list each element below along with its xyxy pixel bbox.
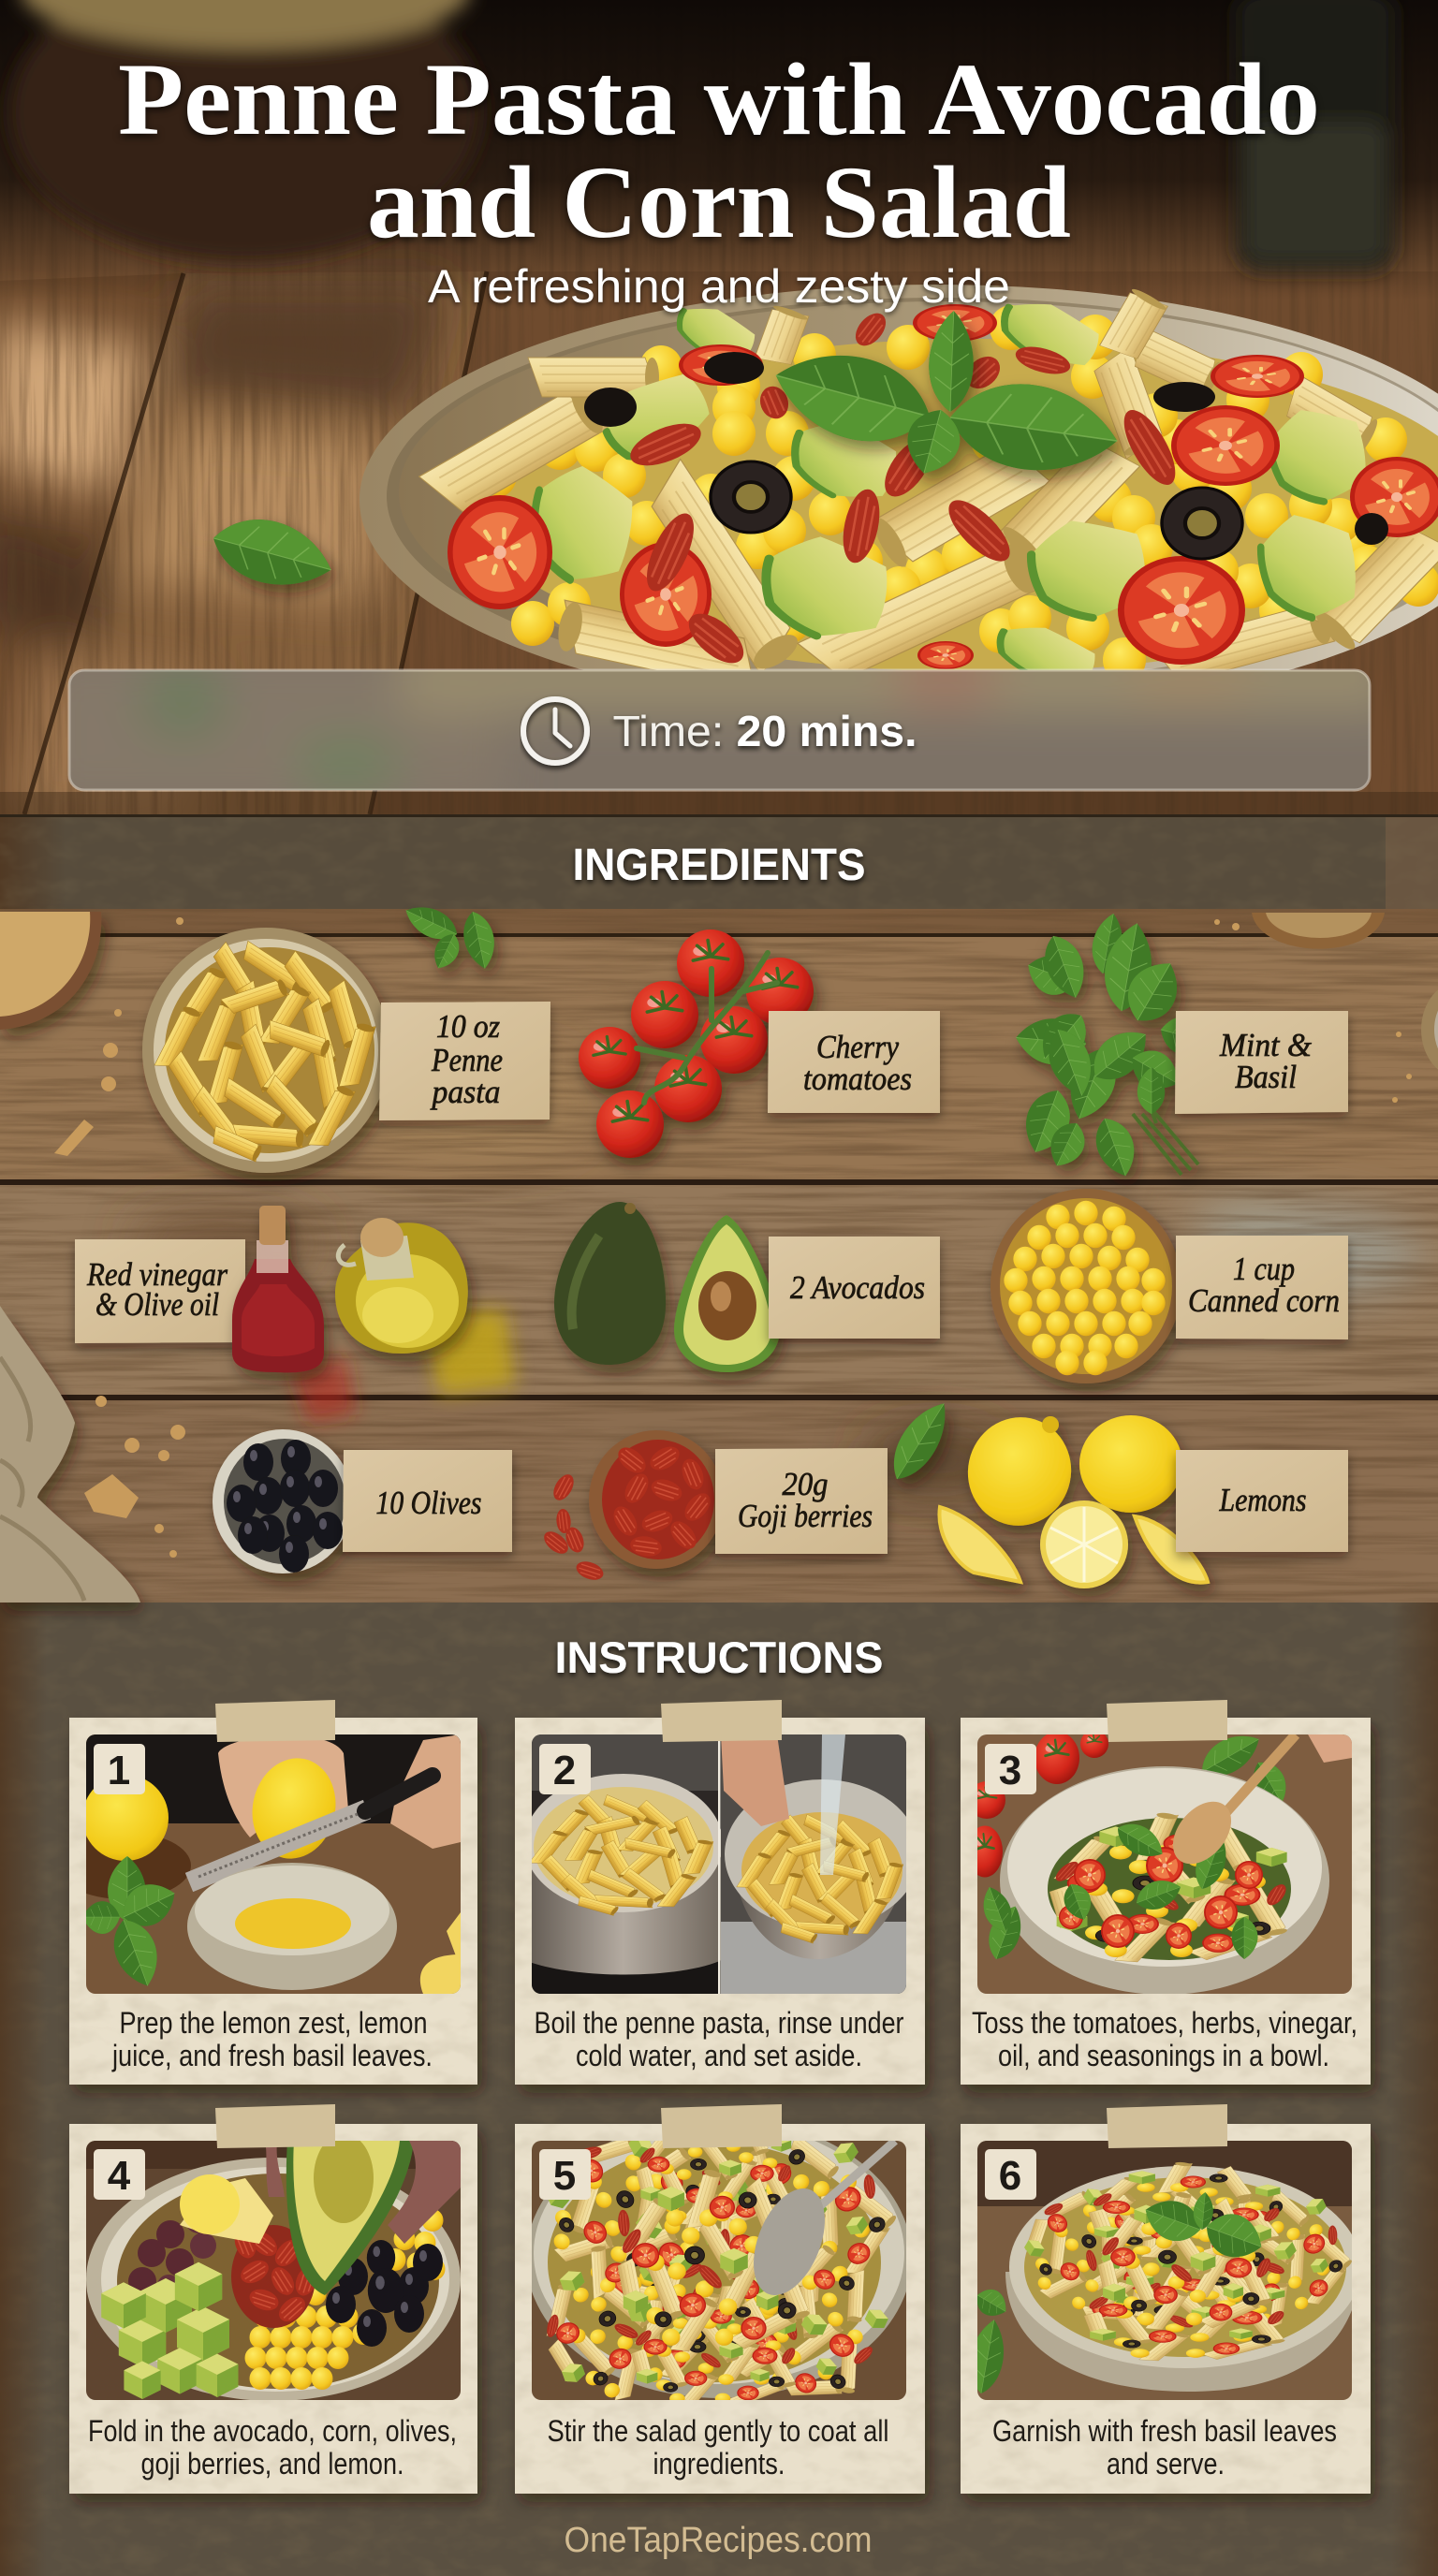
penne pieces <box>419 286 1438 692</box>
title <box>118 42 1320 259</box>
linen cloth <box>0 1306 140 1603</box>
number badge <box>94 1744 145 1794</box>
step text: juice, and fresh basil leaves. <box>111 2039 433 2072</box>
step card 4 <box>69 2104 477 2494</box>
heading: ingredients: INGREDIENTS <box>573 841 865 890</box>
label: lemons <box>1176 1450 1348 1552</box>
step text <box>88 2414 457 2481</box>
icon: loose goji berries <box>540 1471 606 1583</box>
step text: Stir the salad gently to coat all <box>547 2414 889 2448</box>
colored oil reflections <box>290 1310 515 1423</box>
ingredients wood table <box>0 909 1438 1603</box>
step card 1 <box>56 1700 477 2085</box>
photo: zesting a lemon <box>56 1734 461 1994</box>
photo: boiling and rinsing pasta <box>522 1734 919 1994</box>
label: corn: Canned corn <box>1188 1282 1340 1319</box>
title: Penne Pasta with Avocado <box>118 42 1320 156</box>
label: corn: 1 cup <box>1233 1251 1295 1287</box>
label: mint and basil <box>1175 1011 1348 1114</box>
tape <box>661 2104 782 2148</box>
icon: whole avocado <box>554 1202 666 1365</box>
step text: Fold in the avocado, corn, olives, <box>88 2414 457 2448</box>
tape <box>1107 2104 1227 2148</box>
basil garnish <box>765 310 1123 482</box>
tape <box>215 2104 335 2148</box>
avocado chunks <box>526 292 1373 691</box>
step text: ingredients. <box>653 2447 785 2481</box>
label: avocados <box>769 1237 940 1339</box>
step text <box>547 2414 889 2481</box>
label: vinegar and oil <box>75 1239 245 1343</box>
step text: goji berries, and lemon. <box>140 2447 404 2481</box>
icon: clock <box>523 699 587 763</box>
number badge: 5 <box>553 2153 576 2199</box>
icon: corn bowl <box>990 1189 1181 1383</box>
step text: Garnish with fresh basil leaves <box>992 2414 1337 2448</box>
number badge <box>539 1744 591 1794</box>
number badge: 3 <box>999 1748 1021 1793</box>
step card 2 <box>515 1700 925 2085</box>
step card 5 <box>513 2094 925 2494</box>
corn kernels <box>474 305 1438 682</box>
icon: lemons <box>881 1394 1208 1588</box>
tape <box>215 1700 335 1742</box>
step text <box>534 2006 904 2072</box>
crumbs and spices <box>54 917 1412 1558</box>
icon: goji bowl <box>589 1430 724 1569</box>
background bowl, top left <box>9 0 481 262</box>
step text: Toss the tomatoes, herbs, vinegar, <box>972 2006 1357 2040</box>
goji berries <box>624 308 1185 672</box>
label: penne: Penne <box>431 1042 503 1078</box>
label: penne <box>379 1002 550 1120</box>
number badge <box>985 2149 1036 2200</box>
label: vinegar and oil: Red vinegar <box>86 1256 227 1293</box>
top left crumb bowl <box>0 912 101 1030</box>
label: olives <box>343 1450 512 1552</box>
hero photo: salad bowl on wood <box>0 0 1438 824</box>
step text: and serve. <box>1107 2447 1225 2481</box>
label: olives: 10 Olives <box>376 1485 481 1521</box>
step text <box>992 2414 1337 2481</box>
salad base <box>473 339 1438 672</box>
number badge <box>985 1744 1036 1794</box>
label: cherry tomatoes: tomatoes <box>803 1061 912 1097</box>
photo: folding in toppings <box>86 2133 461 2401</box>
step text: cold water, and set aside. <box>576 2039 862 2072</box>
label: mint and basil: Basil <box>1235 1059 1297 1095</box>
right edge bowl <box>1421 981 1438 1078</box>
label: mint and basil: Mint & <box>1219 1027 1313 1063</box>
time text: Time: 20 mins. <box>612 707 917 755</box>
number badge <box>94 2149 145 2200</box>
ingredients header band <box>0 814 1438 909</box>
icon: avocado half <box>674 1215 780 1372</box>
step card 3 <box>961 1700 1371 2085</box>
label: lemons: Lemons <box>1219 1482 1307 1518</box>
icon: olive oil jar <box>335 1218 468 1354</box>
olive rings <box>584 352 1388 559</box>
icon: red vinegar bottle <box>232 1206 324 1372</box>
top right small bowl <box>1252 913 1385 949</box>
photo: tossing the salad <box>967 1724 1352 1995</box>
loose basil leaf on the table <box>206 507 339 599</box>
label: goji berries: 20g <box>783 1466 828 1502</box>
label: vinegar and oil: & Olive oil <box>95 1286 219 1323</box>
number badge <box>539 2149 591 2200</box>
label: goji berries: Goji berries <box>738 1498 873 1534</box>
tape <box>661 1700 782 1742</box>
salad bowl <box>360 285 1438 715</box>
label: avocados: 2 Avocados <box>790 1269 925 1306</box>
heading: instructions: INSTRUCTIONS <box>554 1632 884 1682</box>
icon: cherry tomatoes <box>579 929 814 1158</box>
step text: oil, and seasonings in a bowl. <box>998 2039 1329 2072</box>
photo: stirring the salad <box>532 2141 906 2400</box>
time bar <box>67 668 1371 792</box>
step text <box>972 2006 1357 2072</box>
footer: OneTapRecipes.com <box>564 2521 873 2560</box>
step text <box>111 2006 433 2072</box>
icon: mint and basil bunch <box>1014 911 1221 1181</box>
label: corn <box>1176 1236 1348 1339</box>
label: penne: pasta <box>430 1074 500 1110</box>
step card 6 <box>961 2104 1371 2494</box>
tomato slices <box>448 304 1438 669</box>
background jar, top right <box>1236 0 1395 271</box>
title: and Corn Salad <box>367 145 1071 259</box>
number badge: 1 <box>108 1748 130 1793</box>
icon: pasta bowl <box>142 928 389 1173</box>
label: penne: 10 oz <box>436 1008 500 1045</box>
step text: Boil the penne pasta, rinse under <box>534 2006 904 2040</box>
tape <box>1107 1700 1227 1742</box>
label: cherry tomatoes <box>768 1011 940 1113</box>
icon: basil sprig <box>400 899 500 973</box>
photo: garnished salad <box>964 2141 1367 2400</box>
step text: Prep the lemon zest, lemon <box>120 2006 427 2040</box>
subtitle: A refreshing and zesty side <box>428 260 1010 313</box>
number badge: 4 <box>108 2153 131 2199</box>
background: dark instructions board <box>0 1591 1438 2576</box>
number badge: 6 <box>999 2153 1021 2199</box>
icon: olives bowl <box>213 1429 353 1573</box>
label: goji berries <box>715 1448 888 1554</box>
label: cherry tomatoes: Cherry <box>816 1029 899 1065</box>
number badge: 2 <box>553 1748 576 1793</box>
